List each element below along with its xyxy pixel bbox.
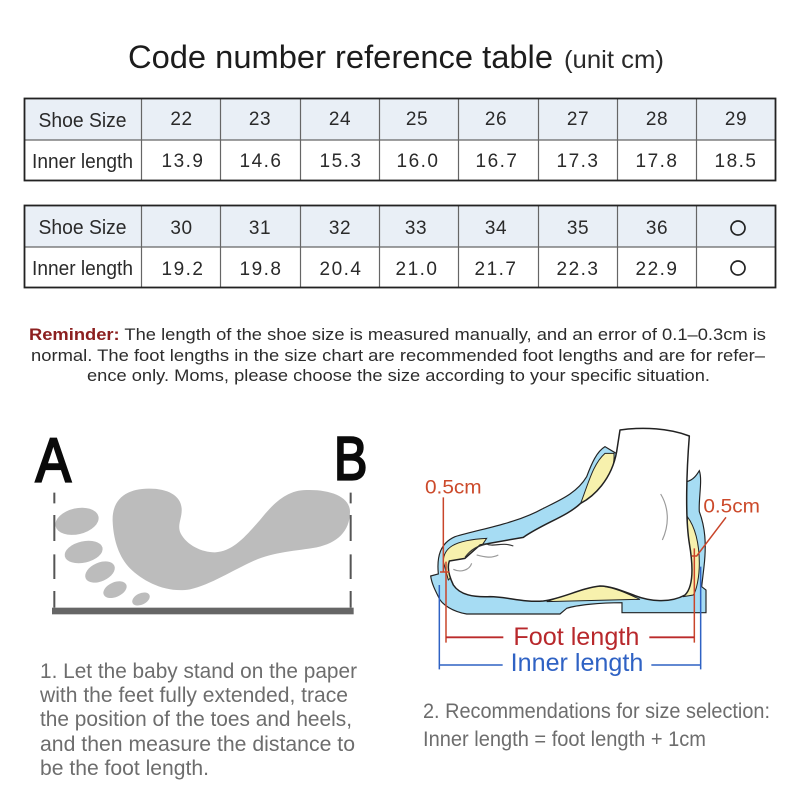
title: (unit cm) <box>564 46 664 74</box>
table: shoe sizes 30 to 36: 20.4 <box>320 259 362 280</box>
dashed guides <box>54 493 351 608</box>
table: shoe sizes 30 to 36: 33 <box>405 218 427 239</box>
table: shoe sizes 30 to 36: 30 <box>170 218 193 239</box>
right 0.5cm label <box>692 496 760 643</box>
table: shoe sizes 30 to 36: 35 <box>567 218 589 239</box>
table: shoe sizes 22 to 29: Inner length <box>32 151 133 173</box>
table: shoe sizes 22 to 29: 14.6 <box>240 151 282 172</box>
table: shoe sizes 30 to 36: 36 <box>646 218 668 239</box>
insole <box>443 453 699 602</box>
table: shoe sizes 22 to 29: 17.8 <box>636 151 678 172</box>
table: shoe sizes 22 to 29: 27 <box>567 109 589 130</box>
foot <box>448 428 692 601</box>
diagram: foot outline between A and B <box>36 423 367 614</box>
instruction 1: the position of the toes and heels, <box>40 707 352 731</box>
foot details <box>453 494 667 571</box>
table: shoe sizes 22 to 29: 24 <box>329 109 351 130</box>
table: shoe sizes 22 to 29: 17.3 <box>557 151 599 172</box>
shoe sole and upper <box>431 447 706 614</box>
table: shoe sizes 22 to 29: 16.0 <box>397 151 439 172</box>
instruction 1 <box>39 659 357 780</box>
inner length dimension <box>439 567 701 677</box>
left 0.5cm label <box>425 477 482 643</box>
table: shoe sizes 22 to 29: 16.7 <box>476 151 518 172</box>
table: shoe sizes 22 to 29: 22 <box>170 109 193 130</box>
table: shoe sizes 30 to 36: Inner length <box>32 258 133 280</box>
table: shoe sizes 30 to 36: 21.7 <box>475 259 517 280</box>
reminder text: ence only. Moms, please choose the size according to your specific situation. <box>87 366 710 385</box>
table: shoe sizes 22 to 29: 15.3 <box>320 151 362 172</box>
instruction 1: be the foot length. <box>40 756 209 780</box>
table: shoe sizes 30 to 36: Shoe Size <box>38 217 126 239</box>
table: shoe sizes 30 to 36: 22.9 <box>636 259 678 280</box>
diagram: foot in shoe <box>425 428 760 677</box>
inner length dimension: Inner length <box>511 650 643 677</box>
instruction 1: and then measure the distance to <box>40 732 355 756</box>
table: shoe sizes 30 to 36: 19.2 <box>162 259 204 280</box>
toe lines <box>465 544 513 557</box>
table: shoe sizes 22 to 29: 13.9 <box>162 151 204 172</box>
title: Code number reference table <box>128 38 553 75</box>
table: shoe sizes 30 to 36: 19.8 <box>240 259 282 280</box>
table: shoe sizes 30 to 36: 21.0 <box>396 259 438 280</box>
reminder text: normal. The foot lengths in the size chart are recommended foot lengths and are for refer– <box>31 346 766 365</box>
instruction 2: 2. Recommendations for size selection: <box>423 700 770 723</box>
instruction 1: with the feet fully extended, trace <box>39 683 348 707</box>
table: shoe sizes 22 to 29: 29 <box>725 109 747 130</box>
instruction 2 <box>423 700 770 751</box>
table: shoe sizes 22 to 29: 18.5 <box>715 151 757 172</box>
reminder text: Reminder: The length of the shoe size is measured manually, and an error of 0.1–0.3cm is <box>29 325 766 344</box>
table: shoe sizes 30 to 36: 31 <box>249 218 271 239</box>
right 0.5cm label: 0.5cm <box>703 496 760 517</box>
table: shoe sizes 22 to 29: 28 <box>646 109 668 130</box>
letter A: A <box>36 427 72 496</box>
table: shoe sizes 30 to 36 <box>24 206 776 288</box>
table: shoe sizes 22 to 29: Shoe Size <box>38 110 126 132</box>
footprint <box>53 489 350 608</box>
table: shoe sizes 22 to 29 <box>24 98 776 180</box>
letter B: B <box>334 423 367 492</box>
reminder text <box>29 325 766 385</box>
table: shoe sizes 30 to 36: 22.3 <box>557 259 599 280</box>
instruction 1: 1. Let the baby stand on the paper <box>40 659 357 683</box>
foot length dimension: Foot length <box>513 624 639 651</box>
table: shoe sizes 30 to 36: 32 <box>329 218 351 239</box>
table: shoe sizes 22 to 29: 23 <box>249 109 271 130</box>
baseline <box>52 608 354 614</box>
table: shoe sizes 30 to 36: 34 <box>485 218 507 239</box>
left 0.5cm label: 0.5cm <box>425 477 482 498</box>
table: shoe sizes 22 to 29: 25 <box>406 109 428 130</box>
table: shoe sizes 22 to 29: 26 <box>485 109 507 130</box>
instruction 2: Inner length = foot length + 1cm <box>423 728 706 751</box>
